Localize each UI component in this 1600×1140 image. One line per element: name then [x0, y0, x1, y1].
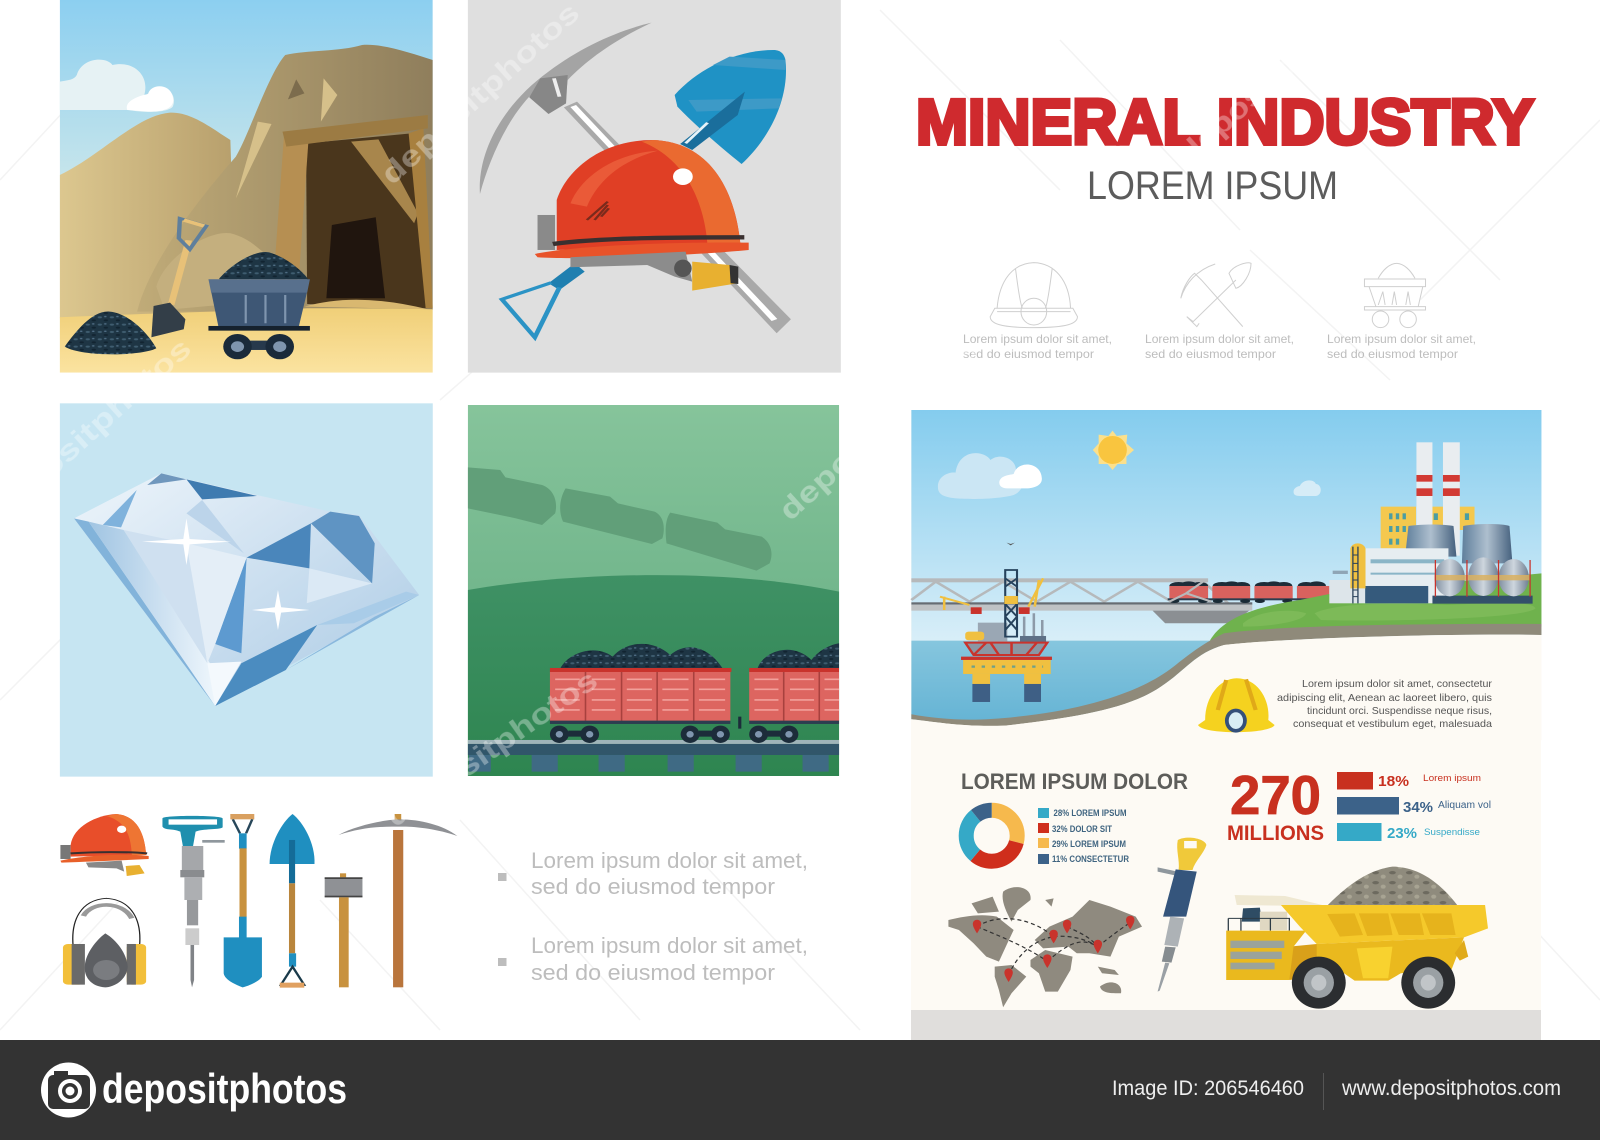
- icon: respirator and ear muffs: [63, 898, 146, 987]
- icon caption 2: [1145, 332, 1294, 361]
- line icon: helmet: [990, 263, 1077, 328]
- train on bridge: [1168, 581, 1329, 603]
- bird: [1006, 543, 1015, 545]
- subtitle: LOREM IPSUM: [1087, 164, 1338, 208]
- icon caption 3: sed do eiusmod tempor: [1327, 347, 1458, 361]
- bar stat 34%: Aliquam vol: [1438, 800, 1491, 811]
- pick: [480, 23, 791, 333]
- watermarks: depositphotos: [380, 663, 604, 834]
- footer logo text: depositphotos: [102, 1065, 347, 1112]
- bar stat 23%: Suspendisse: [1424, 827, 1480, 837]
- bullet text one: [498, 848, 808, 899]
- shore strip: [911, 624, 1541, 726]
- icon: pickaxe: [338, 814, 457, 987]
- icon: small helmet: [60, 814, 149, 876]
- helmet description text: adipiscing elit, Aenean ac laoreet libero, quis: [1277, 692, 1492, 704]
- sand ground: [60, 308, 433, 373]
- panel: coal train: [468, 405, 839, 776]
- cloud: [60, 60, 174, 112]
- mine cart: [208, 252, 310, 359]
- legend: 32% DOLOR SIT: [1052, 824, 1112, 834]
- icon caption 1: [963, 332, 1112, 361]
- tanker silhouettes: [468, 467, 772, 571]
- bullet text one: sed do eiusmod tempor: [531, 874, 776, 899]
- legend: [1038, 808, 1129, 864]
- icon caption 1: Lorem ipsum dolor sit amet,: [963, 332, 1112, 346]
- footer logo icon: [41, 1062, 96, 1118]
- icon: sledgehammer: [325, 873, 362, 987]
- coal pile: [65, 312, 156, 354]
- legend: 28% LOREM IPSUM: [1054, 808, 1126, 818]
- panel: crossed tools and helmet: [468, 0, 841, 373]
- bar stat 23%: [1337, 823, 1480, 842]
- diamond gem: [74, 473, 419, 706]
- jackhammer: [1158, 838, 1206, 992]
- sea: [911, 641, 1233, 725]
- heading: LOREM IPSUM DOLOR: [961, 769, 1188, 794]
- donut chart: [966, 810, 1017, 861]
- icon: spade: [224, 814, 262, 987]
- helmet description text: [1277, 678, 1493, 730]
- legend: 29% LOREM IPSUM: [1052, 839, 1126, 849]
- watermarks: depositphotos: [773, 332, 984, 527]
- red helmet: [535, 140, 749, 291]
- bullet text one: Lorem ipsum dolor sit amet,: [531, 848, 808, 873]
- helmet description text: tincidunt orci. Suspendisse neque risus,: [1307, 705, 1492, 717]
- clouds: [938, 453, 1321, 499]
- watermarks: [0, 0, 1373, 834]
- icon: shovel: [270, 814, 315, 988]
- watermarks: depositphotos: [375, 0, 586, 191]
- helmet description text: Lorem ipsum dolor sit amet, consectetur: [1302, 678, 1493, 690]
- icon caption 3: Lorem ipsum dolor sit amet,: [1327, 332, 1476, 346]
- sun: [1093, 431, 1134, 470]
- icon caption 2: sed do eiusmod tempor: [1145, 347, 1276, 361]
- dump truck: [1226, 867, 1488, 1009]
- rail track: [468, 740, 839, 772]
- sparkles: [142, 518, 309, 630]
- statistic 270 millions: MILLIONS: [1227, 822, 1324, 845]
- line icon: cart: [1364, 263, 1426, 328]
- bar stat 23%: 23%: [1387, 825, 1417, 842]
- helmet description text: consequat et vestibulum eget, malesuada: [1293, 718, 1492, 730]
- footer bar: [0, 1040, 1600, 1140]
- watermarks: depositphotos: [1173, 0, 1373, 170]
- bullet text two: sed do eiusmod tempor: [531, 960, 776, 985]
- panel: mine entrance: [60, 0, 433, 373]
- bar stat 18%: Lorem ipsum: [1423, 773, 1481, 783]
- panel: diamond: [60, 403, 433, 777]
- shovel: [151, 218, 206, 337]
- power plant: [1329, 442, 1533, 604]
- back mountain: [60, 113, 236, 318]
- green land: [1210, 573, 1541, 641]
- panel: industrial landscape: [911, 410, 1541, 740]
- bar stat 18%: 18%: [1378, 773, 1409, 790]
- bullet text two: [498, 933, 808, 985]
- line icon: pick and shovel: [1181, 263, 1251, 327]
- bar stat 18%: [1337, 772, 1481, 790]
- title: MINERAL INDUSTRY: [916, 86, 1534, 158]
- bridge: [911, 578, 1252, 623]
- website: www.depositphotos.com: [1341, 1077, 1561, 1100]
- tool icons row: [60, 814, 457, 988]
- mountain facets: [156, 78, 337, 310]
- panel: infographic background: [911, 410, 1541, 1040]
- bar stat 34%: 34%: [1403, 799, 1433, 816]
- rest of cream: [911, 635, 1541, 740]
- wheels: [550, 717, 798, 743]
- coal wagon two: [749, 643, 839, 724]
- hill: [468, 575, 839, 776]
- statistic 270 millions: 270: [1230, 764, 1321, 826]
- icon caption 2: Lorem ipsum dolor sit amet,: [1145, 332, 1294, 346]
- icon caption 1: sed do eiusmod tempor: [963, 347, 1094, 361]
- bar stat 34%: [1337, 797, 1491, 816]
- bullet text two: Lorem ipsum dolor sit amet,: [531, 933, 808, 958]
- main mountain: [137, 45, 433, 312]
- icon caption 3: [1327, 332, 1476, 361]
- mine tunnel: [273, 115, 433, 309]
- yellow helmet: [1198, 678, 1275, 733]
- icon: jackhammer: [162, 816, 225, 987]
- coal wagon one: [550, 644, 731, 724]
- world map: [948, 887, 1142, 1007]
- image id: Image ID: 206546460: [1112, 1077, 1304, 1100]
- oil rig: [940, 570, 1052, 702]
- shovel: [502, 50, 786, 337]
- legend: 11% CONSECTETUR: [1052, 854, 1129, 864]
